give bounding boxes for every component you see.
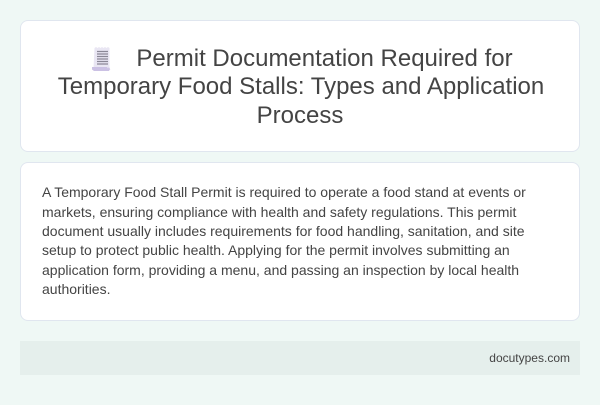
text block: description: setup to protect public health. Applying for the permit involves submitting an — [42, 242, 510, 258]
title: Temporary Food Stalls: Types and Application — [58, 73, 544, 100]
text block: description — [42, 184, 526, 297]
text block: description: A Temporary Food Stall Permit is required to operate a food stand at events or — [42, 184, 526, 200]
text block: description: markets, ensuring compliance with health and safety regulations. This permit — [42, 204, 516, 220]
text block: description: authorities. — [42, 281, 110, 297]
title — [58, 45, 544, 129]
title: Permit Documentation Required for — [136, 45, 513, 72]
panel: title card — [20, 20, 580, 152]
text block: description: document usually includes requirements for food handling, sanitation, and site — [42, 223, 525, 239]
footer text: docutypes.com — [489, 351, 570, 365]
title: Process — [257, 102, 343, 129]
panel: description card — [20, 162, 580, 321]
footer bar — [20, 341, 580, 375]
icon: document scroll — [92, 47, 110, 71]
text block: description: application form, providing a menu, and passing an inspection by local health — [42, 262, 519, 278]
